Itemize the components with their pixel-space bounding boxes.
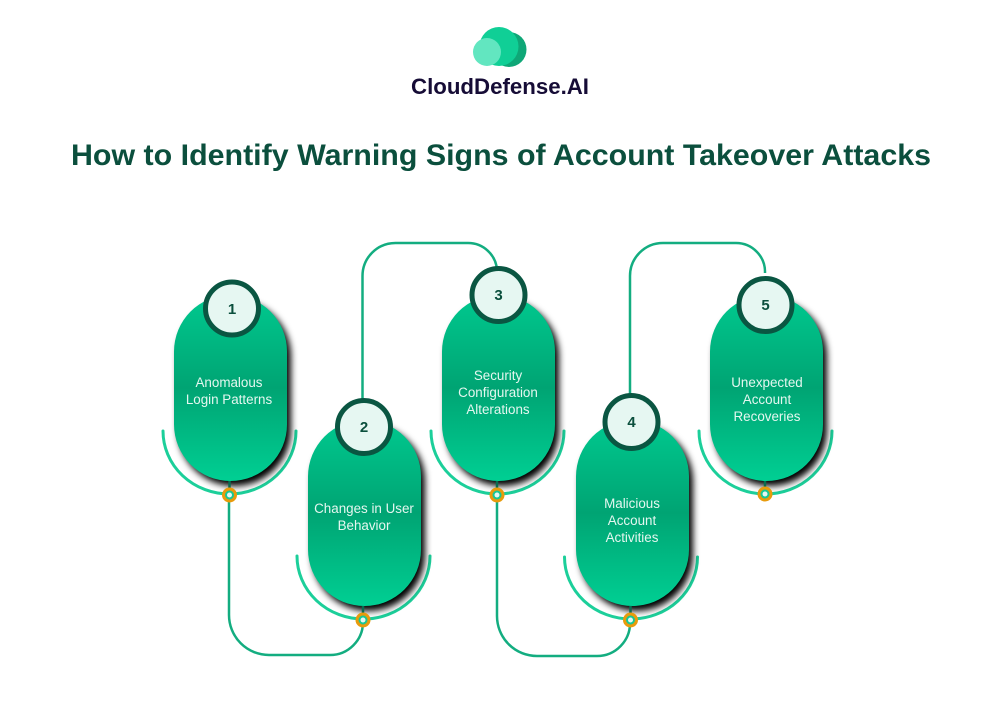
step 3: Security [474, 368, 522, 383]
connector: 3 to 4 [497, 495, 630, 656]
step 3: 3 [494, 287, 503, 304]
step 1 [163, 282, 296, 501]
step 4 [564, 396, 698, 626]
connector: 2 to 3 [362, 243, 497, 400]
connector: 1 to 2 [229, 495, 363, 655]
step 5: 5 [761, 297, 770, 314]
step 1: Login Patterns [186, 392, 272, 407]
step 5: Recoveries [734, 409, 801, 424]
step 4: Malicious [604, 496, 660, 511]
step 2: 2 [360, 419, 368, 436]
title: How to Identify Warning Signs of Account Takeover Attacks [71, 139, 931, 172]
connector: 4 to 5 [630, 243, 765, 400]
step 1: 1 [228, 301, 236, 318]
step 5 [699, 278, 832, 500]
step 2: Behavior [338, 518, 391, 533]
step 4: Account [608, 513, 656, 528]
step 4: Activities [606, 530, 659, 545]
step 4: 4 [627, 414, 636, 431]
logo [411, 27, 589, 99]
logo: CloudDefense.AI [411, 74, 589, 99]
step 2 [297, 400, 430, 626]
step 3: Configuration [458, 385, 538, 400]
step 5: Account [743, 392, 791, 407]
step 5: Unexpected [731, 375, 803, 390]
step 3 [431, 268, 564, 501]
step 3: Alterations [466, 402, 530, 417]
step 1: Anomalous [196, 375, 263, 390]
step 2: Changes in User [314, 501, 414, 516]
